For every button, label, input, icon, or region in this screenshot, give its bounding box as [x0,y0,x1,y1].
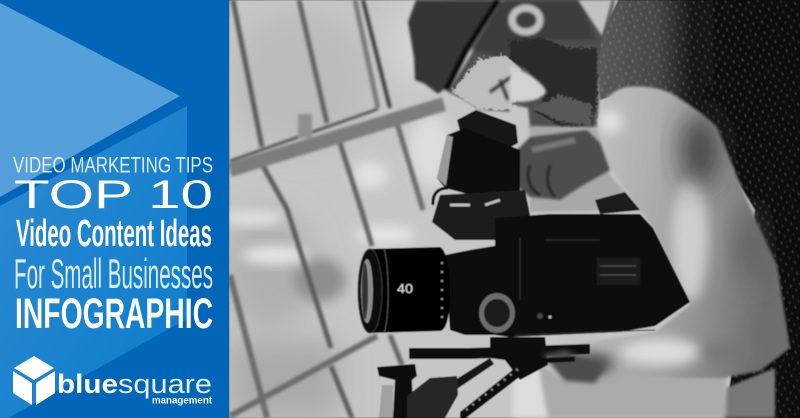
line: top 10: TOP 10 [14,173,213,217]
skin base [448,0,615,128]
icon: white cube [13,356,55,405]
window mullions [230,0,444,418]
wordmark: square: square [118,369,212,399]
cheek and wrinkles [452,55,522,110]
man's hat [408,0,502,94]
logo: bluesquare management [13,356,213,406]
wordmark: management: management [152,396,213,406]
blue panel [0,0,229,418]
lens barrel [368,247,450,333]
photo: videographer with cinema camera [225,0,800,418]
line: infographic: INFOGRAPHIC [15,290,213,338]
cage and cables [432,190,530,240]
lens focal marking: 40 [397,281,413,296]
man's hand on the grip [517,130,610,200]
window background [225,0,559,418]
viewfinder [433,110,520,205]
wordmark: blue: blue [57,369,118,399]
mid-blue play triangle [0,106,187,418]
man's arm [540,87,790,383]
neck highlight [578,0,612,36]
hair above ear [470,0,596,60]
lower camera cage [490,337,548,380]
text: For Small Businesses [14,250,213,297]
light-blue play triangle [0,3,180,197]
title [13,152,213,338]
hand under camera [543,350,605,383]
light background behind the arm [512,126,726,418]
fingers at the chin [510,66,546,102]
rig plates [447,358,494,393]
man's face and beard [448,0,615,128]
top handle and post [377,364,417,418]
line: video marketing tips: VIDEO MARKETING TIPS [13,152,213,178]
lens mount [445,240,510,335]
man's shirt [598,0,800,418]
camera [358,110,690,418]
camera body [495,214,690,337]
beard [510,38,597,126]
line: video content ideas: Video Content Ideas [16,213,212,255]
rods [409,344,590,359]
ear [508,4,544,36]
